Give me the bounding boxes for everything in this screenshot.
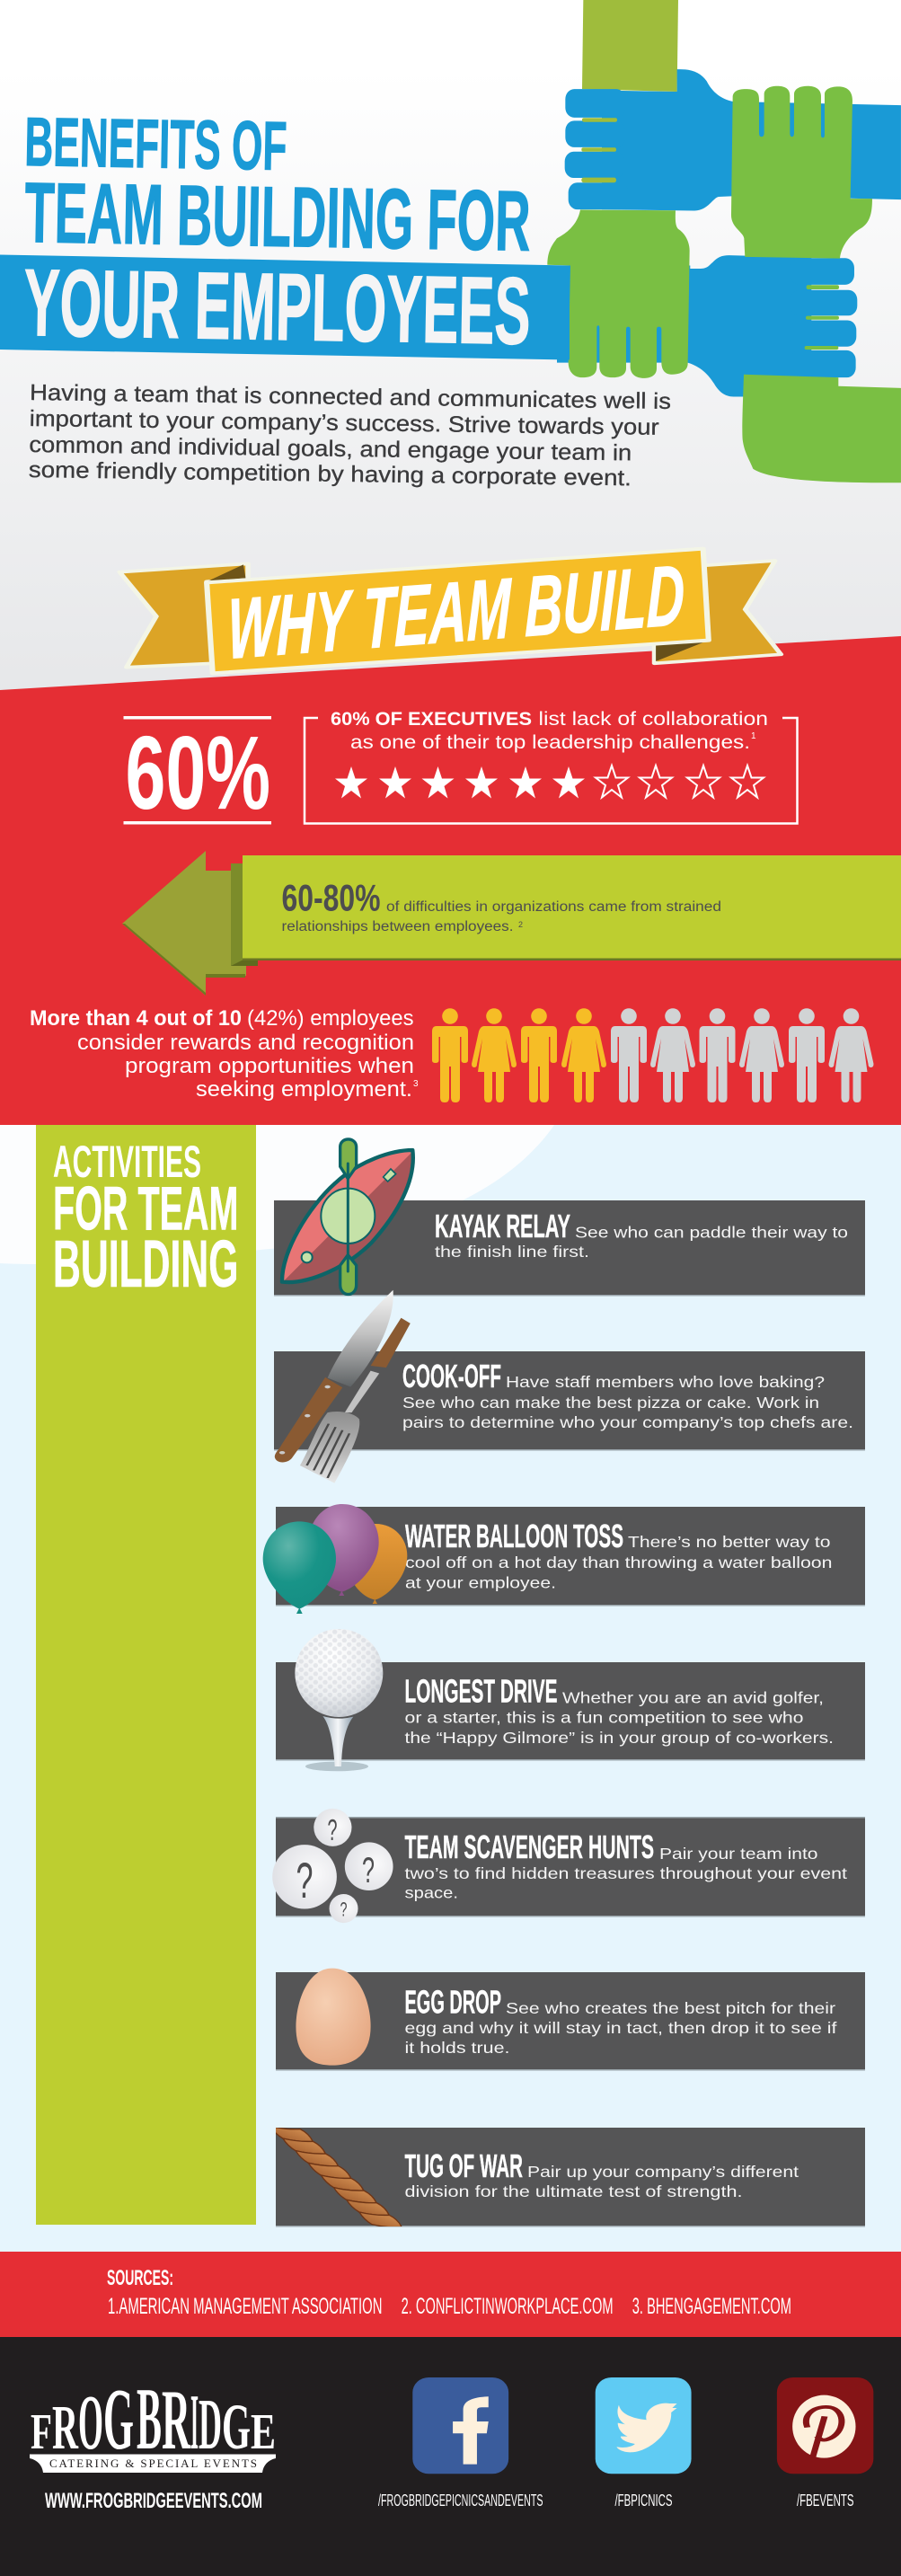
icon: twitter — [596, 2377, 692, 2474]
panel: activities heading column: ACTIVITIES — [53, 1137, 201, 1187]
icon: question mark bubbles: ? — [296, 1852, 313, 1908]
card: water balloon toss: cool off on a hot day than throwing a water balloon — [405, 1554, 832, 1571]
icon: question mark bubbles: ? — [340, 1898, 347, 1921]
social handle labels: /FBEVENTS — [797, 2492, 853, 2510]
card: water balloon toss: WATER BALLOON TOSS — [405, 1518, 623, 1554]
icon: rope — [270, 2126, 402, 2227]
panel: hands graphic — [547, 0, 901, 482]
logo: frogbridge: G — [103, 2371, 134, 2468]
card: kayak relay: KAYAK RELAY — [435, 1208, 570, 1244]
card: cook-off: See who can make the best pizza or cake. Work in — [402, 1394, 819, 1412]
icon: knife and fork — [275, 1290, 411, 1483]
card: team scavenger hunts: TEAM SCAVENGER HUNTS — [404, 1828, 654, 1865]
title line: your employees: YOUR EMPLOYEES — [23, 250, 532, 365]
card: tug of war: TUG OF WAR — [404, 2147, 523, 2184]
stat text: 42 percent employees: consider rewards and recognition — [77, 1031, 414, 1055]
card: egg drop: See who creates the best pitch for their — [506, 1999, 835, 2017]
ribbon banner: why team build — [119, 548, 781, 677]
card: longest drive: or a starter, this is a fun competition to see who — [404, 1709, 803, 1727]
panel: executives stat box — [305, 709, 798, 823]
stat: 60 percent: 60% — [126, 714, 270, 831]
social handle labels — [378, 2492, 853, 2510]
card: kayak relay — [274, 1200, 865, 1296]
card: cook-off: COOK-OFF — [402, 1358, 501, 1394]
panel: activities heading column — [36, 1125, 256, 2225]
card: longest drive — [276, 1662, 865, 1761]
icon: kayak — [282, 1139, 413, 1294]
card: egg drop — [276, 1972, 865, 2070]
intro paragraph: some friendly competition by having a corporate event. — [29, 457, 632, 491]
card: cook-off — [274, 1351, 865, 1450]
intro paragraph — [29, 380, 671, 491]
people pictogram: 4 of 10 highlighted — [432, 1008, 873, 1102]
stat text: 42 percent employees: program opportunities when — [125, 1054, 414, 1078]
icon: question mark bubbles — [272, 1809, 393, 1923]
card: water balloon toss — [276, 1507, 865, 1607]
icon: question mark bubbles: ? — [362, 1851, 375, 1890]
card: egg drop: egg and why it will stay in tact, then drop it to see if — [404, 2019, 837, 2037]
stat text: 60-80 percent: 2 — [518, 920, 523, 929]
title line: benefits of: BENEFITS OF — [24, 103, 287, 185]
logo: frogbridge: F — [31, 2404, 52, 2460]
top background — [0, 0, 901, 701]
stat text: 42 percent employees: More than 4 out of 10 — [30, 1006, 242, 1031]
icon: balloons — [263, 1504, 407, 1614]
card: team scavenger hunts: Pair your team into — [659, 1845, 817, 1863]
icon: golf ball on tee — [295, 1629, 383, 1771]
icon: question mark bubbles: ? — [327, 1813, 338, 1846]
stat text: 60-80 percent: relationships between employees. — [282, 919, 514, 934]
intro paragraph: important to your company’s success. Strive towards your — [30, 406, 659, 440]
sources band: 1.AMERICAN MANAGEMENT ASSOCIATION — [108, 2294, 383, 2319]
logo: frogbridge: E — [251, 2404, 276, 2460]
panel: executives stat box: 60% OF EXECUTIVES — [331, 709, 532, 730]
stat: 60 percent — [124, 714, 271, 831]
curved light background shape — [0, 1125, 554, 1264]
arrow: olive ribbon arrow — [122, 851, 901, 996]
card: team scavenger hunts: two’s to find hidden treasures throughout your event — [404, 1864, 847, 1882]
sources band — [0, 2252, 901, 2337]
star rating: 6 of 10 — [335, 766, 764, 798]
card: team scavenger hunts — [276, 1817, 865, 1917]
card: longest drive: Whether you are an avid golfer, — [562, 1689, 824, 1707]
card: tug of war — [276, 2128, 865, 2226]
card: tug of war: Pair up your company’s different — [527, 2163, 799, 2181]
card: egg drop: EGG DROP — [404, 1984, 501, 2020]
panel: activities heading column: FOR TEAM — [53, 1173, 239, 1244]
activities background — [0, 1123, 901, 2255]
stat text: 42 percent employees — [30, 1006, 419, 1102]
sources band: 3. BHENGAGEMENT.COM — [632, 2294, 791, 2319]
stat text: 60-80 percent: 60-80% — [282, 877, 381, 918]
panel: executives stat box: list lack of collaboration — [539, 709, 768, 730]
logo: frogbridge: I — [190, 2379, 199, 2466]
icon: pinterest — [777, 2377, 873, 2474]
website address: WWW.FROGBRIDGEEVENTS.COM — [45, 2489, 262, 2513]
logo: frogbridge: B — [137, 2370, 162, 2468]
card: kayak relay: the finish line first. — [435, 1243, 589, 1261]
title line: team building for: TEAM BUILDING FOR — [24, 165, 531, 270]
stat text: 42 percent employees: seeking employment. — [196, 1077, 412, 1102]
panel: executives stat box: as one of their top leadership challenges. — [350, 732, 750, 753]
card: kayak relay: See who can paddle their way to — [575, 1224, 848, 1242]
stat text: 60-80 percent: of difficulties in organizations came from strained — [386, 899, 721, 915]
social handle labels: /FROGBRIDGEPICNICSANDEVENTS — [378, 2492, 543, 2510]
footer background — [0, 2337, 901, 2576]
card: water balloon toss: at your employee. — [405, 1574, 556, 1592]
panel: activities heading column: BUILDING — [53, 1226, 239, 1301]
icon: facebook — [412, 2377, 508, 2474]
icon: egg — [296, 1969, 371, 2066]
logo: frogbridge: R — [52, 2394, 79, 2463]
logo: frogbridge — [30, 2370, 276, 2473]
card: tug of war: division for the ultimate test of strength. — [404, 2182, 742, 2200]
card: team scavenger hunts: space. — [404, 1883, 458, 1901]
logo: frogbridge: D — [199, 2384, 222, 2465]
card: water balloon toss: There’s no better way to — [628, 1533, 830, 1551]
logo: frogbridge: G — [222, 2391, 251, 2463]
card: cook-off: Have staff members who love baking? — [506, 1373, 825, 1391]
card: longest drive: the “Happy Gilmore” is in your group of co-workers. — [404, 1729, 834, 1747]
sources band: SOURCES: — [107, 2266, 173, 2290]
card: cook-off: pairs to determine who your company’s top chefs are. — [402, 1413, 853, 1431]
stat text: 60-80 percent — [282, 877, 721, 934]
intro paragraph: common and individual goals, and engage your team in — [29, 432, 632, 465]
logo: frogbridge: R — [162, 2372, 191, 2467]
social handle labels: /FBPICNICS — [614, 2492, 672, 2510]
stat text: 42 percent employees: (42%) employees — [247, 1006, 414, 1031]
card: longest drive: LONGEST DRIVE — [404, 1673, 557, 1709]
intro paragraph: Having a team that is connected and communicates well is — [30, 380, 671, 414]
logo: frogbridge: CATERING & SPECIAL EVENTS — [49, 2456, 257, 2470]
stat text: 42 percent employees: 3 — [413, 1079, 419, 1089]
sources band: 2. CONFLICTINWORKPLACE.COM — [402, 2294, 614, 2319]
logo: frogbridge: O — [78, 2378, 103, 2465]
card: egg drop: it holds true. — [404, 2039, 510, 2057]
panel: why team build red section — [0, 636, 901, 1125]
blue title band — [0, 255, 570, 359]
panel: executives stat box: 1 — [751, 731, 756, 741]
